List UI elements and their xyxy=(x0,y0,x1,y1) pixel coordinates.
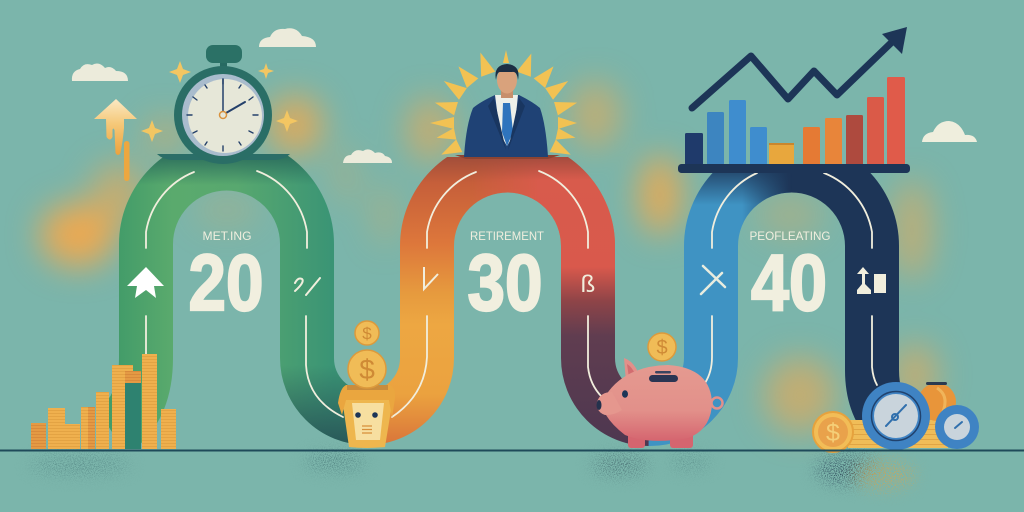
number 40: 40 xyxy=(751,238,827,327)
road segment: blue and navy arch xyxy=(649,165,892,425)
road segment: orange and maroon arch xyxy=(367,166,649,419)
icon: rising drip arrow xyxy=(94,99,137,181)
cloud 3 xyxy=(343,149,392,163)
sparkles xyxy=(141,61,298,142)
bar chart on shelf xyxy=(678,77,910,173)
icon: arrow pawn and block on navy road xyxy=(857,267,886,294)
number 30: 30 xyxy=(468,238,542,327)
icon: cross on blue road xyxy=(701,266,725,294)
label: peopleating: PEOFLEATING xyxy=(750,231,831,243)
icon: squiggle on green road xyxy=(295,278,320,295)
coins and gauges right xyxy=(813,382,979,452)
cloud 4 xyxy=(922,121,977,142)
trend line arrow xyxy=(692,27,907,108)
orange glow patches xyxy=(40,81,937,433)
coin stacks left xyxy=(31,354,176,449)
icon: check mark on orange road xyxy=(424,267,438,289)
cup with coins: $ xyxy=(359,354,375,385)
businessman figure xyxy=(455,64,560,159)
sun rays behind figure xyxy=(430,50,579,161)
cup with coins: $ xyxy=(362,324,372,343)
ground shadow speckles xyxy=(30,454,915,489)
cloud 1 xyxy=(72,64,128,81)
icon: glyph on maroon road: ß xyxy=(581,271,595,298)
piggy bank xyxy=(596,333,722,448)
road centre lines xyxy=(146,171,877,417)
label: meeting: MET.ING xyxy=(202,231,252,243)
piggy bank: $ xyxy=(656,337,668,359)
road segment: green arch xyxy=(112,164,367,432)
stopwatch xyxy=(157,45,290,164)
label: retirement: RETIREMENT xyxy=(470,231,544,243)
cup with coins xyxy=(338,321,395,448)
number 20: 20 xyxy=(188,238,264,327)
icon: white up arrow on green road xyxy=(127,267,164,298)
cloud 2 xyxy=(259,28,316,47)
ground line xyxy=(0,450,1024,452)
coins and gauges right: $ xyxy=(826,419,840,447)
